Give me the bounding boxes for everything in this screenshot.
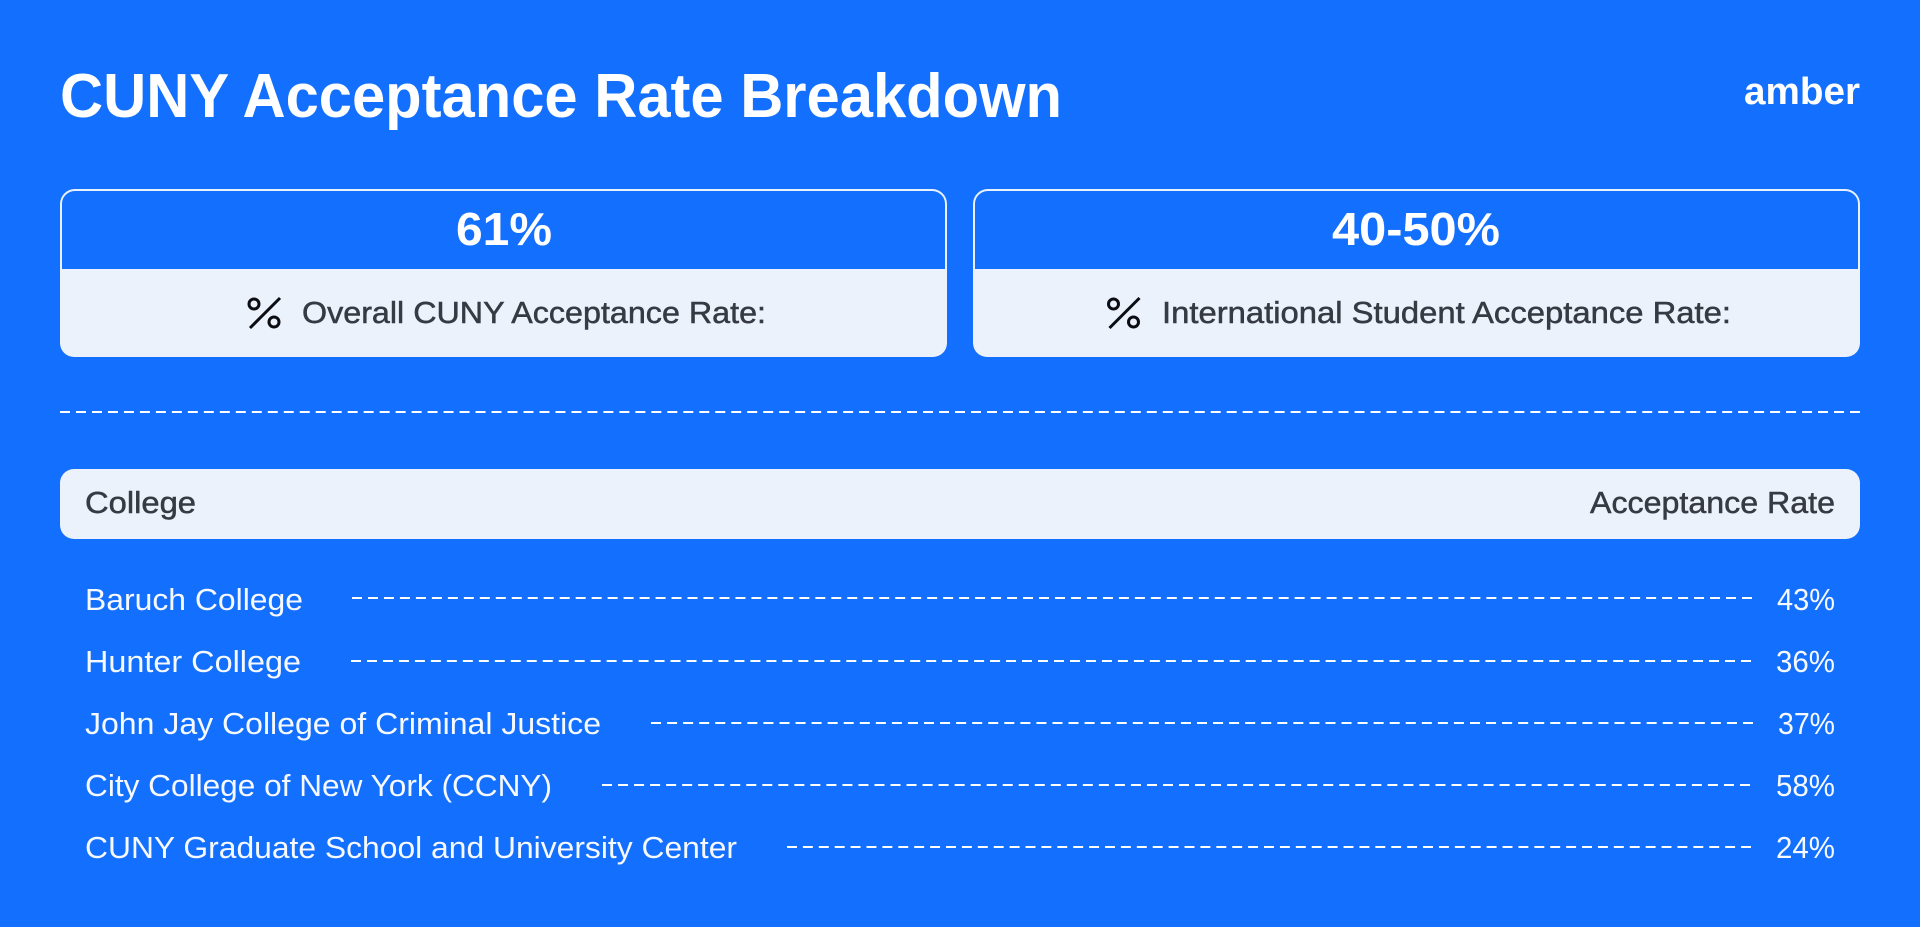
row: CUNY Graduate School: CUNY Graduate School and University Center <box>85 831 737 865</box>
row: City College of New York <box>85 769 1835 803</box>
row: City College of New York: 58% <box>1776 769 1835 803</box>
row: Baruch College <box>85 583 1835 617</box>
stat: 40-50%: 40-50% <box>1332 203 1500 255</box>
icon: percent <box>1108 298 1140 328</box>
row: John Jay College: 37% <box>1778 707 1835 741</box>
row: John Jay College <box>85 707 1835 741</box>
label: international rate: International Student Acceptance Rate: <box>1162 296 1731 330</box>
row: CUNY Graduate School: 24% <box>1776 831 1835 865</box>
title: CUNY Acceptance Rate Breakdown <box>60 62 1062 131</box>
panel: international acceptance rate <box>973 190 1860 357</box>
column heading: college: College <box>85 486 196 520</box>
panel: overall acceptance rate <box>60 190 947 357</box>
row: Hunter College <box>85 645 1835 679</box>
table header <box>60 469 1860 539</box>
stat: 61%: 61% <box>456 203 552 255</box>
row: CUNY Graduate School <box>85 831 1835 865</box>
label: overall rate: Overall CUNY Acceptance Rate: <box>302 296 766 330</box>
row: Hunter College: 36% <box>1776 645 1835 679</box>
logo: amber: amber <box>1744 71 1860 113</box>
row: Hunter College: Hunter College <box>85 645 301 679</box>
column heading: acceptance rate: Acceptance Rate <box>1590 486 1835 520</box>
row: City College of New York: City College of New York (CCNY) <box>85 769 552 803</box>
row: John Jay College: John Jay College of Criminal Justice <box>85 707 601 741</box>
icon: percent <box>249 298 280 328</box>
row: Baruch College: Baruch College <box>85 583 303 617</box>
row: Baruch College: 43% <box>1777 583 1835 617</box>
